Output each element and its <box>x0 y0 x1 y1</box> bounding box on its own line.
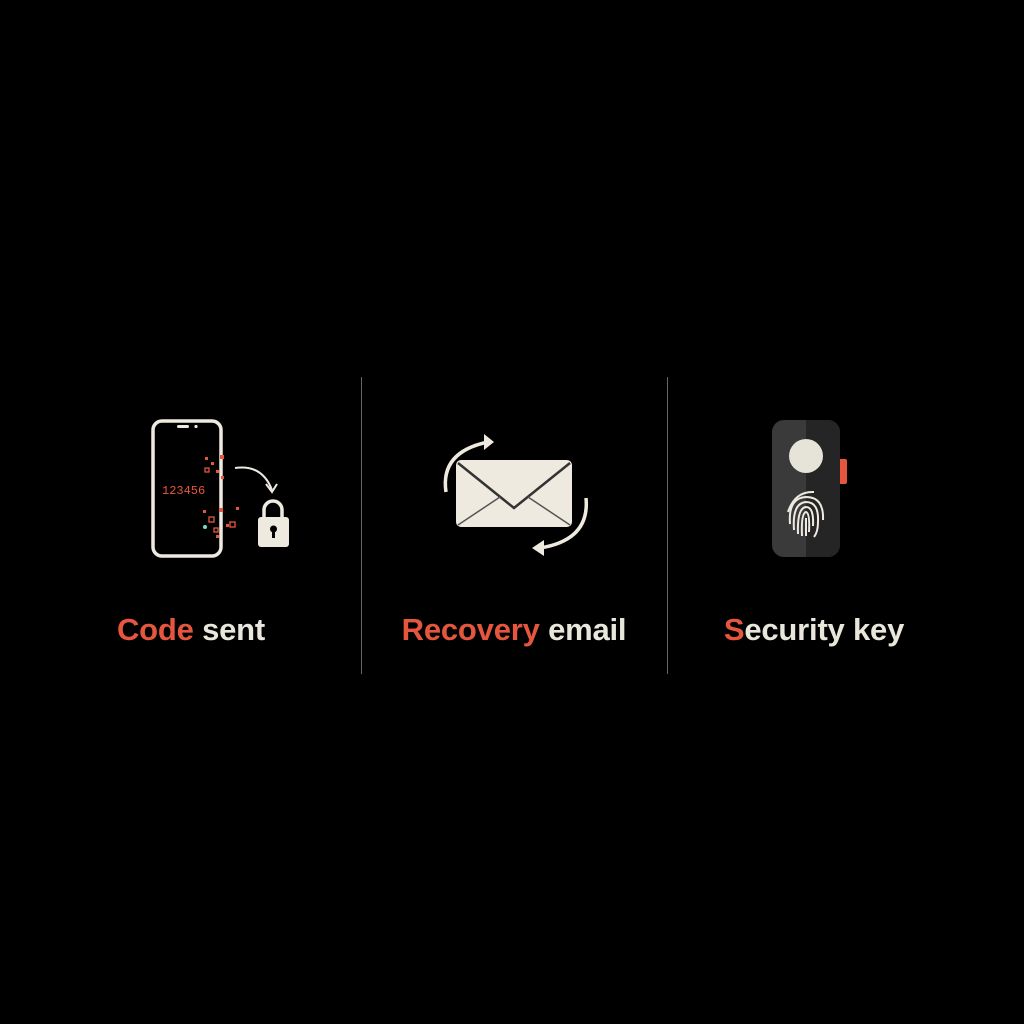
label: recovery email: Recovery email <box>402 612 626 647</box>
icon: envelope with arrows <box>444 434 588 556</box>
icon: security key <box>772 420 847 557</box>
icon: phone with code: 123456 <box>162 484 205 498</box>
label: security key: Security key <box>724 612 904 647</box>
label: code sent: Code sent <box>117 612 265 647</box>
icon: phone with code <box>151 419 289 558</box>
